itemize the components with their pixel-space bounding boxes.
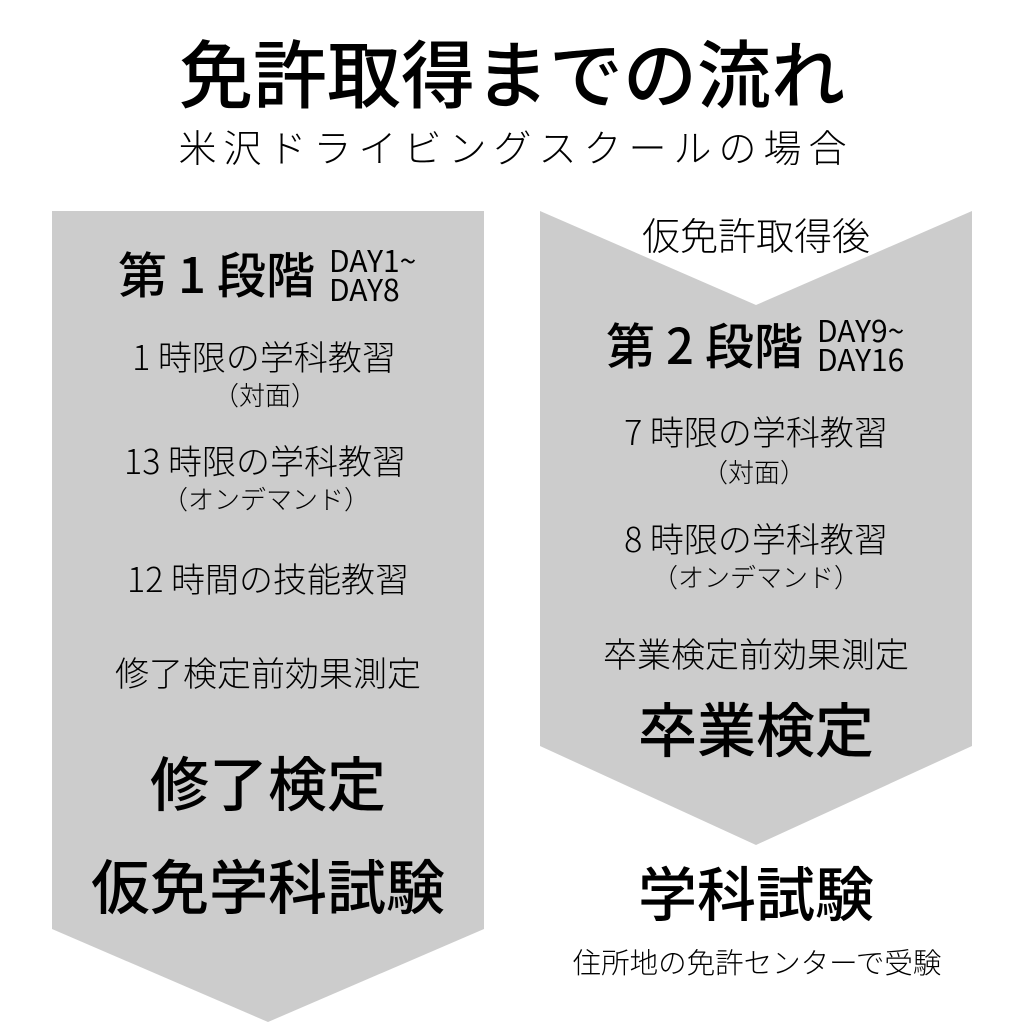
- text: skills lessons: 12 時間の技能教習: [127, 553, 409, 602]
- subtitle: 米沢ドライビングスクールの場合: [178, 118, 854, 173]
- text: lesson 13: 13 時限の学科教習: [124, 435, 406, 484]
- text: after provisional license: 仮免許取得後: [642, 206, 870, 261]
- stage 2 days: DAY9~: [817, 307, 904, 351]
- text: pre-graduation test: 卒業検定前効果測定: [603, 628, 909, 677]
- text: graduation exam: 卒業検定: [638, 684, 874, 769]
- text: completion exam: 修了検定: [150, 738, 386, 823]
- text: provisional written exam: 仮免学科試験: [91, 841, 445, 926]
- text: lesson 1 note: （対面）: [213, 376, 317, 413]
- stage 1 days: [329, 237, 416, 310]
- text: written exam: 学科試験: [638, 848, 874, 933]
- heading: stage 2: 第 2 段階: [606, 308, 803, 379]
- text: exam location: 住所地の免許センターで受験: [573, 941, 941, 982]
- text: lesson 1: 1 時限の学科教習: [132, 331, 396, 380]
- stage 1 days: DAY8: [329, 266, 400, 310]
- text: lesson 8: 8 時限の学科教習: [624, 513, 888, 562]
- text: lesson 7: 7 時限の学科教習: [624, 406, 888, 455]
- panel: stage 2 content: [603, 206, 909, 769]
- text: lesson 8 note: （オンデマンド）: [652, 558, 860, 595]
- text: lesson 13 note: （オンデマンド）: [162, 480, 370, 517]
- stage 2 days: [817, 307, 904, 380]
- heading: stage 1: 第 1 段階: [118, 237, 315, 308]
- text: lesson 7 note: （対面）: [702, 453, 806, 490]
- stage 1 days: DAY1~: [329, 237, 416, 281]
- panel: stage 1 content: [91, 237, 445, 926]
- title: 免許取得までの流れ: [179, 17, 845, 124]
- stage 2 days: DAY16: [817, 336, 904, 380]
- text: pre-exam test: 修了検定前効果測定: [115, 647, 421, 696]
